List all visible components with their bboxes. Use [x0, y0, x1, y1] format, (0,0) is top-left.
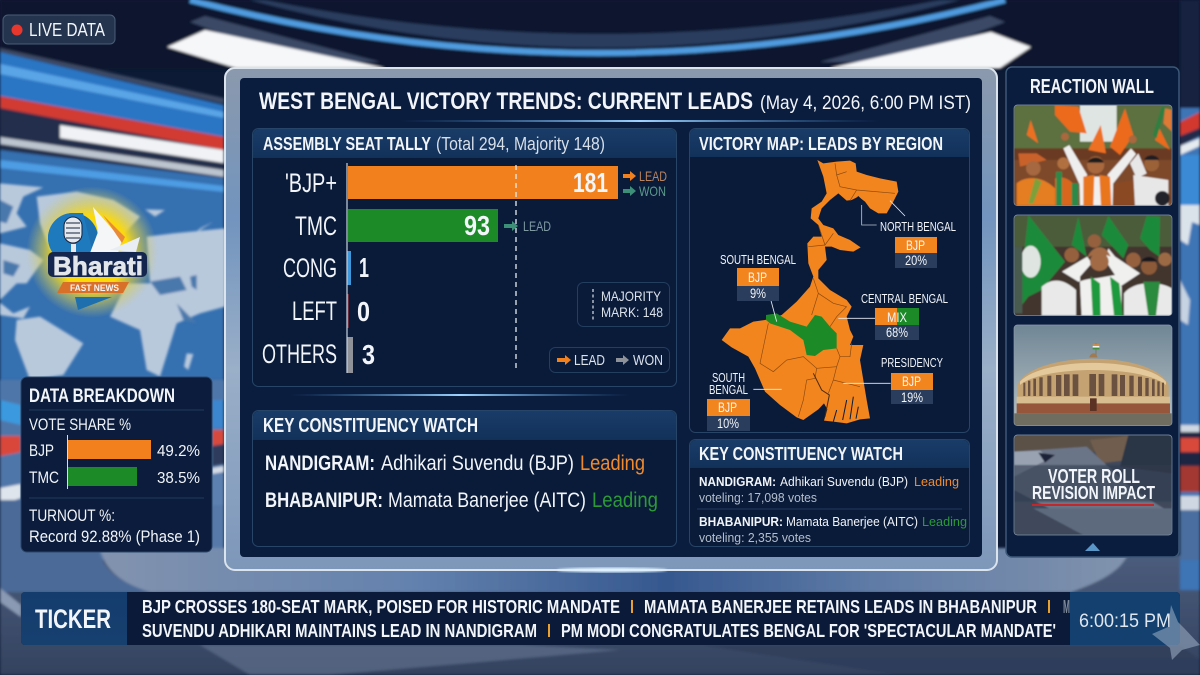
region label: north bengal: 20% — [905, 252, 927, 268]
live data badge — [3, 15, 115, 44]
bar chart: seats: TMC — [295, 211, 337, 241]
photo: parliament building — [1014, 325, 1172, 426]
row: Nandigram votes: voteling: 17,098 votes — [699, 490, 817, 505]
photo: voter roll revision — [1014, 435, 1172, 535]
row: Nandigram: NANDIGRAM: — [265, 452, 375, 475]
ticker line 2: SUVENDU ADHIKARI MAINTAINS LEAD IN NANDIGRAM — [142, 621, 537, 641]
ticker line 2 — [142, 621, 1056, 641]
heading: KEY CONSTITUENCY WATCH — [263, 415, 478, 437]
bar chart: seats: 3 — [362, 339, 375, 370]
logo: Bharati Fast News: Bharati — [53, 251, 143, 281]
panel: data breakdown: VOTE SHARE % — [29, 415, 131, 434]
bar chart: seats: 181 — [573, 167, 608, 198]
ticker line 1 — [142, 597, 1070, 617]
region label: central bengal: CENTRAL BENGAL — [861, 291, 948, 306]
bar chart: seats: OTHERS — [262, 339, 337, 369]
region label: south bengal lower — [707, 370, 750, 431]
region label: central bengal — [861, 291, 948, 340]
row: Nandigram — [265, 452, 645, 475]
ticker label: TICKER — [35, 604, 111, 634]
row: Bhabanipur: BHABANIPUR: — [265, 489, 383, 512]
bar annotations: lead and won arrows: LEAD — [639, 168, 667, 184]
row: Bhabanipur votes: voteling: 2,355 votes — [699, 530, 811, 545]
region label: south bengal lower: BENGAL — [709, 382, 748, 397]
region label: south bengal upper: 9% — [750, 285, 766, 301]
heading: KEY CONSTITUENCY WATCH — [699, 444, 903, 464]
ticker bar — [21, 592, 1180, 645]
region label: south bengal upper: BJP — [748, 269, 767, 285]
bar chart: seats: 'BJP+ — [285, 168, 337, 198]
world map — [0, 183, 225, 380]
row: Bhabanipur votes: Mamata Banerjee (AITC) — [786, 514, 918, 529]
icon: scroll up arrow — [1085, 543, 1100, 551]
region label: north bengal: BJP — [906, 237, 925, 253]
row: Bhabanipur votes: BHABANIPUR: — [699, 514, 783, 529]
region label: south bengal lower: 10% — [717, 415, 739, 431]
icon: microphone — [64, 217, 82, 253]
caption: voter roll revision impact: VOTER ROLL — [1048, 466, 1140, 488]
bar chart: seats: 0 — [357, 296, 370, 327]
legend — [550, 348, 670, 372]
bar annotations: lead and won arrows: LEAD — [523, 218, 551, 234]
region label: presidency: 19% — [901, 389, 923, 405]
panel: key constituency watch (left) — [252, 410, 676, 546]
region label: presidency — [881, 355, 943, 405]
photo: BJP supporters celebrating — [1014, 105, 1172, 206]
title: (May 4, 2026, 6:00 PM IST) — [760, 93, 971, 114]
region label: presidency: BJP — [902, 373, 921, 389]
clock: 6:00:15 PM — [1079, 611, 1171, 632]
row: Nandigram votes: NANDIGRAM: — [699, 474, 776, 489]
heading: assembly seat tally: ASSEMBLY SEAT TALLY — [263, 134, 431, 154]
turnout text — [29, 506, 200, 546]
main frame — [225, 68, 997, 572]
bar chart: seats: LEFT — [292, 296, 337, 326]
ticker line 1: MAMATA BANERJEE RETAINS LEADS IN BHABANIPUR — [644, 597, 1037, 617]
region label: south bengal lower: SOUTH — [712, 370, 745, 385]
bar chart: seats: 1 — [359, 252, 369, 283]
legend: WON — [633, 352, 663, 369]
callout: majority mark: MAJORITY — [601, 288, 662, 304]
row: Nandigram: Leading — [580, 452, 645, 475]
panel: data breakdown — [21, 377, 212, 552]
caption: voter roll revision impact: REVISION IMPACT — [1032, 483, 1155, 503]
bar chart: seats: CONG — [283, 253, 337, 283]
heading: assembly seat tally: (Total 294, Majority 148) — [436, 134, 605, 154]
panel: assembly seat tally — [252, 128, 676, 386]
vote share bars: 38.5% — [157, 470, 200, 487]
panel: reaction wall — [1006, 67, 1179, 557]
row: Bhabanipur: Leading — [592, 489, 658, 512]
row: Bhabanipur: Mamata Banerjee (AITC) — [388, 489, 586, 512]
region label: north bengal: NORTH BENGAL — [880, 219, 956, 234]
legend: LEAD — [574, 352, 605, 369]
bar chart: seats — [262, 163, 618, 373]
turnout text: Record 92.88% (Phase 1) — [29, 527, 200, 546]
ticker line 1: BJP CROSSES 180-SEAT MARK, POISED FOR HISTORIC MANDATE — [142, 597, 620, 617]
bar annotations: lead and won arrows: WON — [639, 183, 666, 199]
logo: Bharati Fast News: FAST NEWS — [70, 283, 119, 294]
row: Nandigram: Adhikari Suvendu (BJP) — [381, 452, 574, 475]
vote share bars: BJP — [29, 441, 54, 460]
row: Bhabanipur — [265, 489, 658, 512]
decorative star — [1152, 605, 1200, 660]
bar chart: seats: 93 — [464, 210, 490, 241]
heading: data breakdown: DATA BREAKDOWN — [29, 386, 175, 407]
region label: south bengal upper: SOUTH BENGAL — [720, 252, 796, 267]
row: Nandigram votes: Leading — [914, 474, 959, 489]
ticker line 2: PM MODI CONGRATULATES BENGAL FOR 'SPECTACULAR MANDATE' — [561, 621, 1056, 641]
heading: reaction wall: REACTION WALL — [1030, 76, 1154, 98]
vote share bars — [29, 435, 200, 489]
row: Nandigram votes: Adhikari Suvendu (BJP) — [780, 474, 908, 489]
region label: south bengal lower: BJP — [718, 399, 737, 415]
map: West Bengal — [722, 160, 905, 423]
row: Bhabanipur votes: Leading — [922, 514, 967, 529]
live data badge: LIVE DATA — [29, 20, 105, 40]
photo: TMC supporters reacting — [1014, 215, 1172, 316]
row: Bhabanipur votes — [699, 514, 967, 545]
row: Nandigram votes — [699, 474, 959, 505]
region label: north bengal — [880, 219, 956, 268]
vote share bars: 49.2% — [157, 443, 200, 460]
region label: central bengal: MIX — [887, 309, 908, 325]
caption: voter roll revision impact — [1032, 466, 1155, 506]
bar annotations: lead and won arrows — [504, 168, 667, 234]
region label: central bengal: 68% — [886, 324, 908, 340]
vote share bars: TMC — [29, 468, 59, 487]
callout: majority mark — [578, 282, 670, 326]
region label: presidency: PRESIDENCY — [881, 355, 943, 370]
logo: Bharati Fast News — [26, 186, 158, 318]
heading: assembly seat tally — [263, 134, 605, 154]
clock — [1070, 592, 1180, 645]
turnout text: TURNOUT %: — [29, 506, 115, 525]
callout: majority mark: MARK: 148 — [601, 304, 663, 320]
panel: victory map — [690, 128, 970, 432]
ticker label — [21, 592, 127, 645]
panel: key constituency watch (right) — [690, 440, 970, 546]
title: WEST BENGAL VICTORY TRENDS: CURRENT LEADS — [259, 88, 753, 115]
region label: south bengal upper — [720, 252, 796, 301]
heading: victory map: VICTORY MAP: LEADS BY REGION — [699, 134, 943, 154]
ticker bar: M — [1063, 597, 1070, 617]
